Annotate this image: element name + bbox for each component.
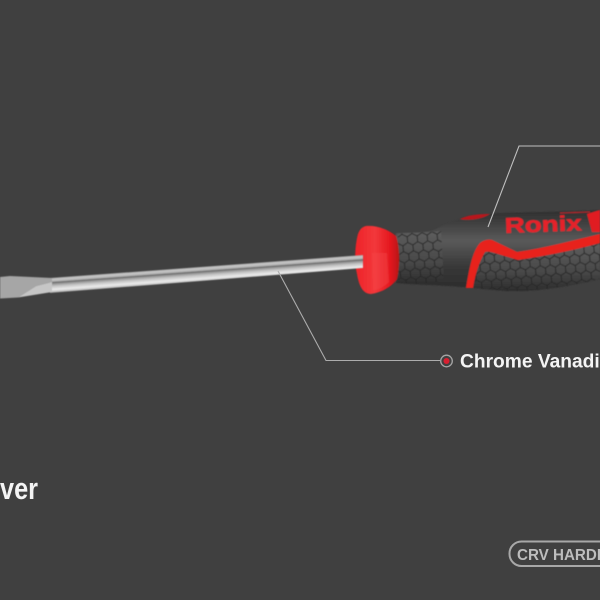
rear hex grip [398, 231, 444, 284]
red end cap [355, 226, 399, 294]
leader line: shaft [278, 271, 440, 360]
brand text: Ronix [504, 211, 582, 238]
front hex grip [473, 243, 600, 291]
marker dot [441, 355, 452, 367]
red stripe [466, 234, 600, 288]
flat blade tip [0, 276, 52, 298]
screwdriver shaft and blade [0, 255, 363, 298]
handle body [396, 210, 600, 291]
blade bevel [18, 282, 52, 298]
badge: CRV hardened [510, 542, 600, 566]
screwdriver handle [355, 210, 600, 294]
title fragment: ver [0, 471, 38, 506]
leader line: handle [488, 146, 600, 227]
red label block [560, 210, 600, 232]
red top accent [460, 214, 490, 220]
